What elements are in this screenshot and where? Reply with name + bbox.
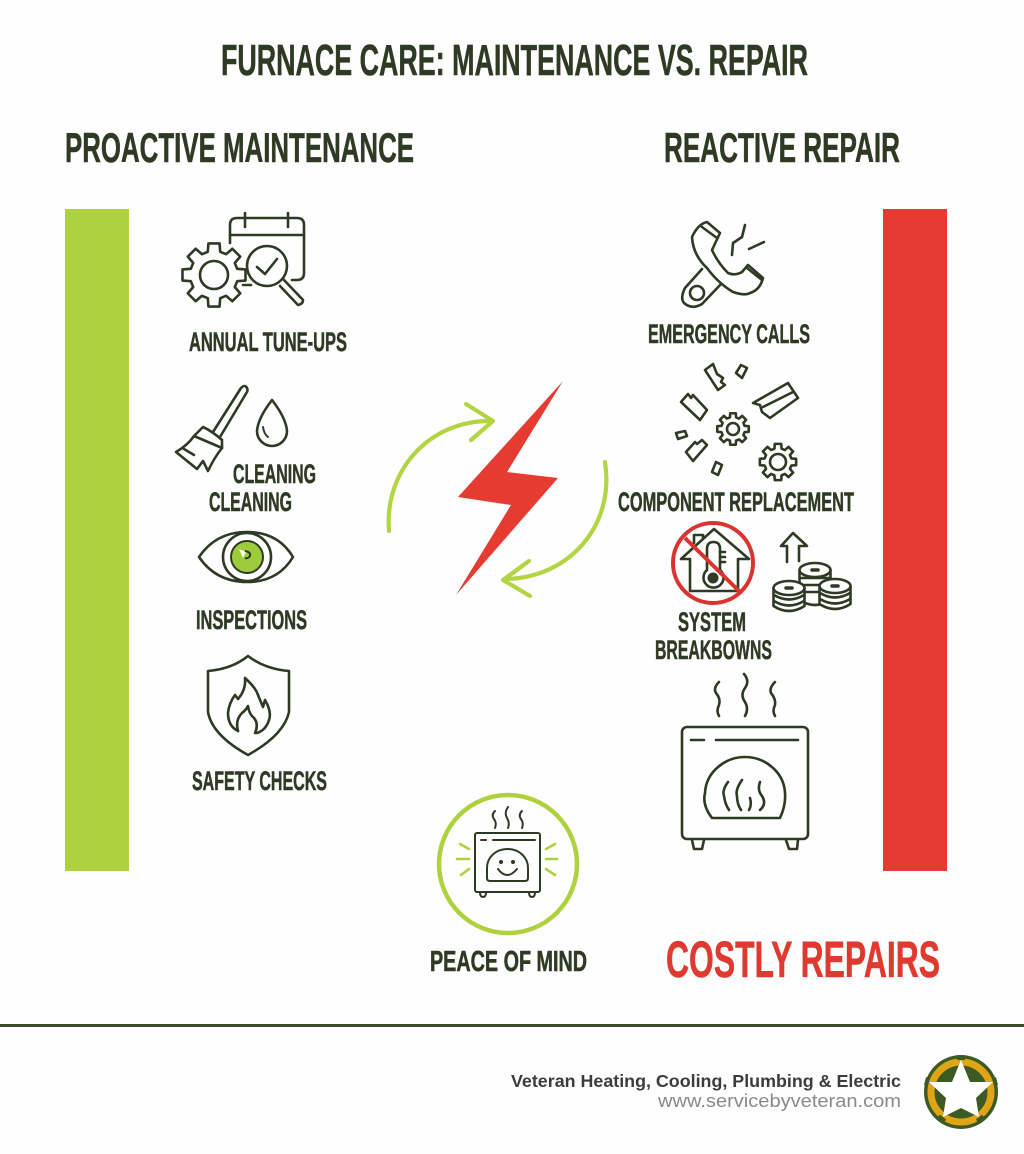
green maintenance bar (65, 209, 129, 871)
footer company name: Veteran Heating, Cooling, Plumbing & Electric (511, 1071, 901, 1091)
icon: phone with wrench (682, 222, 764, 307)
label: cleaning lower: CLEANING (209, 487, 292, 517)
icon: calendar gear magnifier (182, 213, 304, 307)
icon: furnace (682, 674, 808, 849)
heading: proactive maintenance: PROACTIVE MAINTENANCE (65, 124, 414, 171)
arrow: green upper (389, 404, 493, 531)
label: component replacement: COMPONENT REPLACEMENT (618, 487, 854, 517)
label: system: SYSTEM (678, 607, 746, 637)
label: inspections: INSPECTIONS (196, 605, 307, 635)
footer website: www.servicebyveteran.com (657, 1091, 901, 1111)
cycle arrows and lightning (389, 381, 606, 596)
label: peace of mind: PEACE OF MIND (430, 946, 587, 978)
icon: peace of mind furnace (439, 795, 577, 933)
footer divider (0, 1024, 1024, 1027)
icon: red lightning bolt (456, 381, 563, 595)
label: annual tune-ups: ANNUAL TUNE-UPS (189, 327, 347, 357)
arrow: green lower (503, 462, 606, 596)
label: cleaning upper: CLEANING (233, 459, 316, 489)
icon: no heat house (673, 523, 753, 603)
logo: star badge (924, 1055, 998, 1129)
label: emergency calls: EMERGENCY CALLS (648, 319, 810, 349)
icon: shield with flame (208, 656, 289, 755)
label: breakbowns: BREAKBOWNS (655, 635, 772, 665)
icon: water drop (257, 400, 287, 446)
red repair bar (883, 209, 947, 871)
label: safety checks: SAFETY CHECKS (192, 766, 327, 796)
icon: broom (176, 386, 248, 471)
icon: eye (199, 532, 293, 582)
icon: broken components (676, 364, 798, 480)
icon: arrow up with coins (774, 533, 850, 611)
